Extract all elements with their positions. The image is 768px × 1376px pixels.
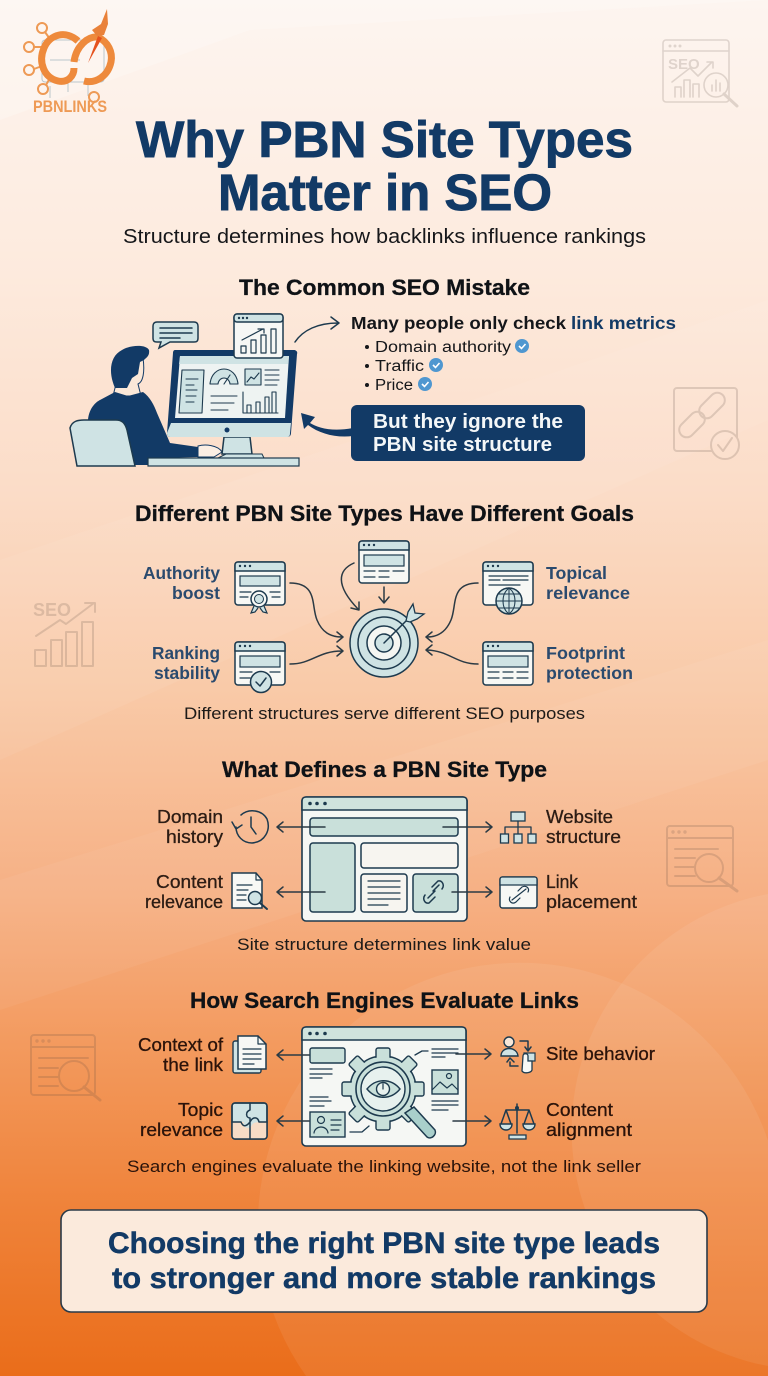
caption: goals: Different structures serve different SEO purposes xyxy=(184,705,585,723)
text: link metrics: Many people only check xyxy=(351,313,566,333)
labels: goals left: Ranking xyxy=(152,643,220,663)
arrow: to link metrics xyxy=(295,317,339,342)
watermark: SEO report: SEO xyxy=(668,56,700,73)
monitor stand and desk xyxy=(222,437,252,454)
labels: defines left: history xyxy=(166,827,223,847)
subtitle: Structure determines how backlinks influence rankings xyxy=(123,226,646,248)
labels: evaluate left: Topic xyxy=(178,1100,223,1120)
logo: PBNLINKS xyxy=(33,97,107,116)
person xyxy=(88,346,222,465)
list: metrics: Traffic xyxy=(375,358,424,375)
callout: ignored structure xyxy=(351,405,585,461)
labels: goals right: relevance xyxy=(546,583,630,603)
callout: ignored structure: But they ignore the xyxy=(373,411,563,433)
labels: defines right xyxy=(546,807,637,912)
floating chart xyxy=(234,314,283,358)
logo xyxy=(24,9,111,116)
arrow: to monitor xyxy=(301,413,353,437)
icon: scales xyxy=(500,1104,535,1139)
watermark: site search right xyxy=(667,826,737,891)
labels: goals right: Footprint xyxy=(546,643,625,663)
labels: goals left: boost xyxy=(172,583,220,603)
list: metrics: Price xyxy=(375,377,413,394)
icon: org chart xyxy=(500,812,536,843)
labels: defines left: relevance xyxy=(145,892,223,912)
labels: goals left: stability xyxy=(154,663,220,683)
illustration: person at monitor xyxy=(70,314,299,466)
labels: evaluate left: Context of xyxy=(138,1035,224,1055)
chair xyxy=(70,420,135,466)
labels: defines left: Domain xyxy=(157,807,223,827)
callout: ignored structure: PBN site structure xyxy=(373,434,552,456)
icon: topical window xyxy=(483,562,533,614)
title xyxy=(136,111,633,221)
labels: evaluate left: relevance xyxy=(140,1120,223,1140)
heading: common mistake: The Common SEO Mistake xyxy=(239,275,530,300)
watermark: site search left xyxy=(31,1035,100,1100)
icon: site behavior xyxy=(501,1037,535,1073)
icon: clock xyxy=(232,811,268,843)
icon: document search xyxy=(232,873,267,909)
labels: defines right: Link xyxy=(546,872,579,892)
labels: evaluate right: alignment xyxy=(546,1120,632,1140)
icon: stability window xyxy=(235,642,285,692)
labels: evaluate right: Site behavior xyxy=(546,1044,655,1064)
title: Matter in SEO xyxy=(218,164,552,221)
heading: goals: Different PBN Site Types Have Different Goals xyxy=(135,501,634,526)
heading: defines: What Defines a PBN Site Type xyxy=(222,757,547,782)
caption: evaluate: Search engines evaluate the linking website, not the link seller xyxy=(127,1158,642,1176)
labels: defines right: Website xyxy=(546,807,613,827)
text: link metrics: link metrics xyxy=(571,313,676,333)
watermark: SEO report xyxy=(663,40,737,106)
callout: conclusion xyxy=(61,1210,707,1312)
labels: goals left: Authority xyxy=(143,563,220,583)
diagram: site layout window xyxy=(302,797,467,921)
labels: defines right: structure xyxy=(546,827,621,847)
labels: goals right: Topical xyxy=(546,563,607,583)
icon: footprint window xyxy=(483,642,533,685)
labels: goals right: protection xyxy=(546,663,633,683)
labels: evaluate left: the link xyxy=(163,1055,224,1075)
list: metrics: Domain authority xyxy=(375,339,511,356)
title: Why PBN Site Types xyxy=(136,111,633,168)
labels: defines right: placement xyxy=(546,892,637,912)
heading: evaluate: How Search Engines Evaluate Links xyxy=(190,988,579,1013)
icon: pages xyxy=(233,1036,266,1073)
labels: evaluate right xyxy=(546,1044,655,1140)
caption: defines: Site structure determines link value xyxy=(237,936,531,954)
arrows: defines xyxy=(277,822,492,897)
watermark: chain link xyxy=(674,388,739,459)
watermark: SEO growth chart xyxy=(33,600,95,666)
labels: defines left: Content xyxy=(156,872,223,892)
icon: link window xyxy=(500,877,537,908)
labels: goals left xyxy=(143,563,220,683)
labels: defines left xyxy=(145,807,223,912)
icon: target xyxy=(350,604,424,677)
callout: conclusion: Choosing the right PBN site type leads xyxy=(108,1227,660,1260)
icon: authority window xyxy=(235,562,285,613)
speech bubble xyxy=(153,322,198,348)
diagram: search evaluation window xyxy=(302,1027,466,1146)
monitor xyxy=(167,350,297,437)
icon: puzzle xyxy=(232,1103,267,1139)
text: link metrics xyxy=(351,313,676,394)
labels: evaluate right: Content xyxy=(546,1100,613,1120)
arrows: goals to target xyxy=(290,563,478,664)
labels: goals right xyxy=(546,563,633,683)
icon: top window xyxy=(359,541,409,583)
list: metrics xyxy=(365,339,529,394)
gear and magnifier xyxy=(342,1048,435,1138)
watermark: SEO growth chart: SEO xyxy=(33,600,71,620)
labels: evaluate left xyxy=(138,1035,224,1140)
dashboard contents xyxy=(179,369,279,413)
callout: conclusion: to stronger and more stable rankings xyxy=(112,1262,656,1295)
arrows: evaluate xyxy=(277,1049,491,1126)
